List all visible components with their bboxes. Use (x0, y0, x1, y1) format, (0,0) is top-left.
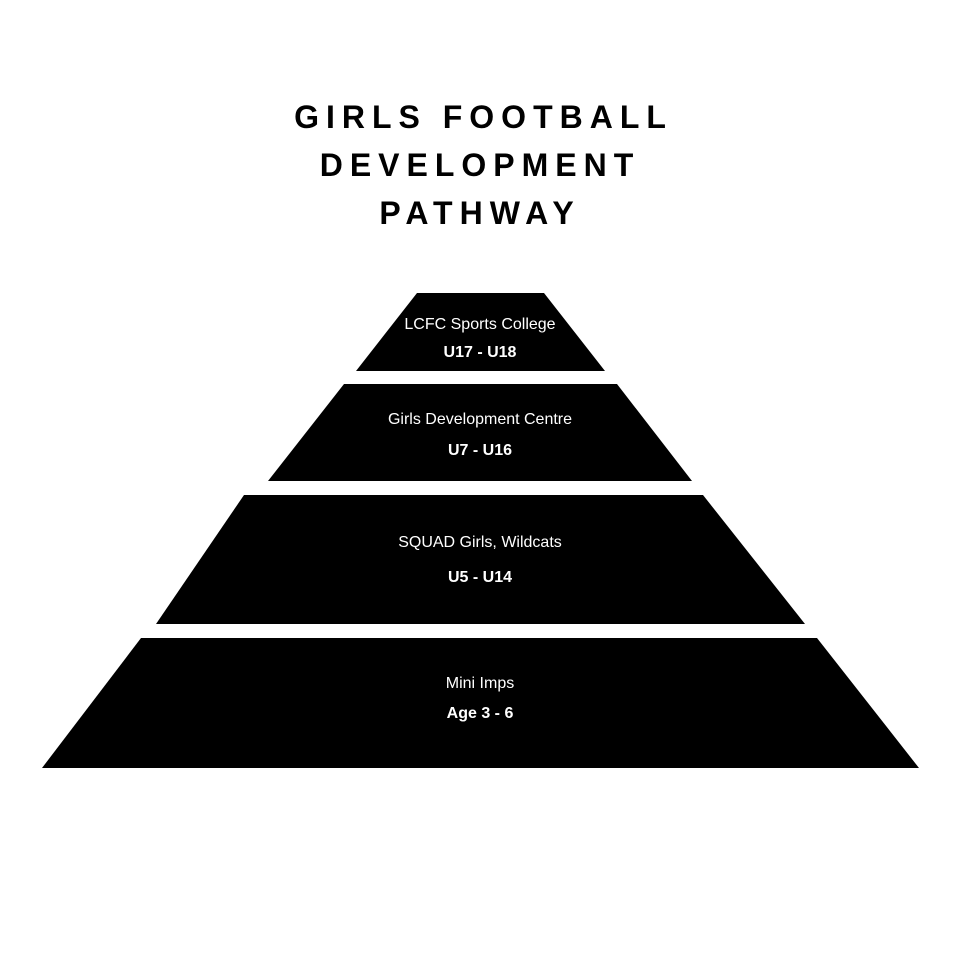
tier 1: LCFC Sports College (356, 293, 605, 371)
title: GIRLS FOOTBALL (294, 99, 673, 135)
tier 3: SQUAD Girls, Wildcats (156, 495, 805, 624)
tier 3: SQUAD Girls, Wildcats: SQUAD Girls, Wildcats (398, 534, 562, 551)
tier 1: LCFC Sports College: LCFC Sports College (404, 316, 556, 333)
title: PATHWAY (379, 195, 581, 231)
title: DEVELOPMENT (320, 147, 640, 183)
tier 1: LCFC Sports College: U17 - U18 (444, 344, 517, 361)
tier 2: Girls Development Centre (268, 384, 692, 481)
tier 4: Mini Imps: Age 3 - 6 (447, 705, 513, 722)
tier 3: SQUAD Girls, Wildcats: U5 - U14 (448, 569, 512, 586)
title (294, 99, 673, 231)
tier 2: Girls Development Centre: U7 - U16 (448, 442, 512, 459)
tier 4: Mini Imps: Mini Imps (446, 675, 514, 692)
tier 2: Girls Development Centre: Girls Development Centre (388, 411, 572, 428)
tier 4: Mini Imps (42, 638, 919, 768)
